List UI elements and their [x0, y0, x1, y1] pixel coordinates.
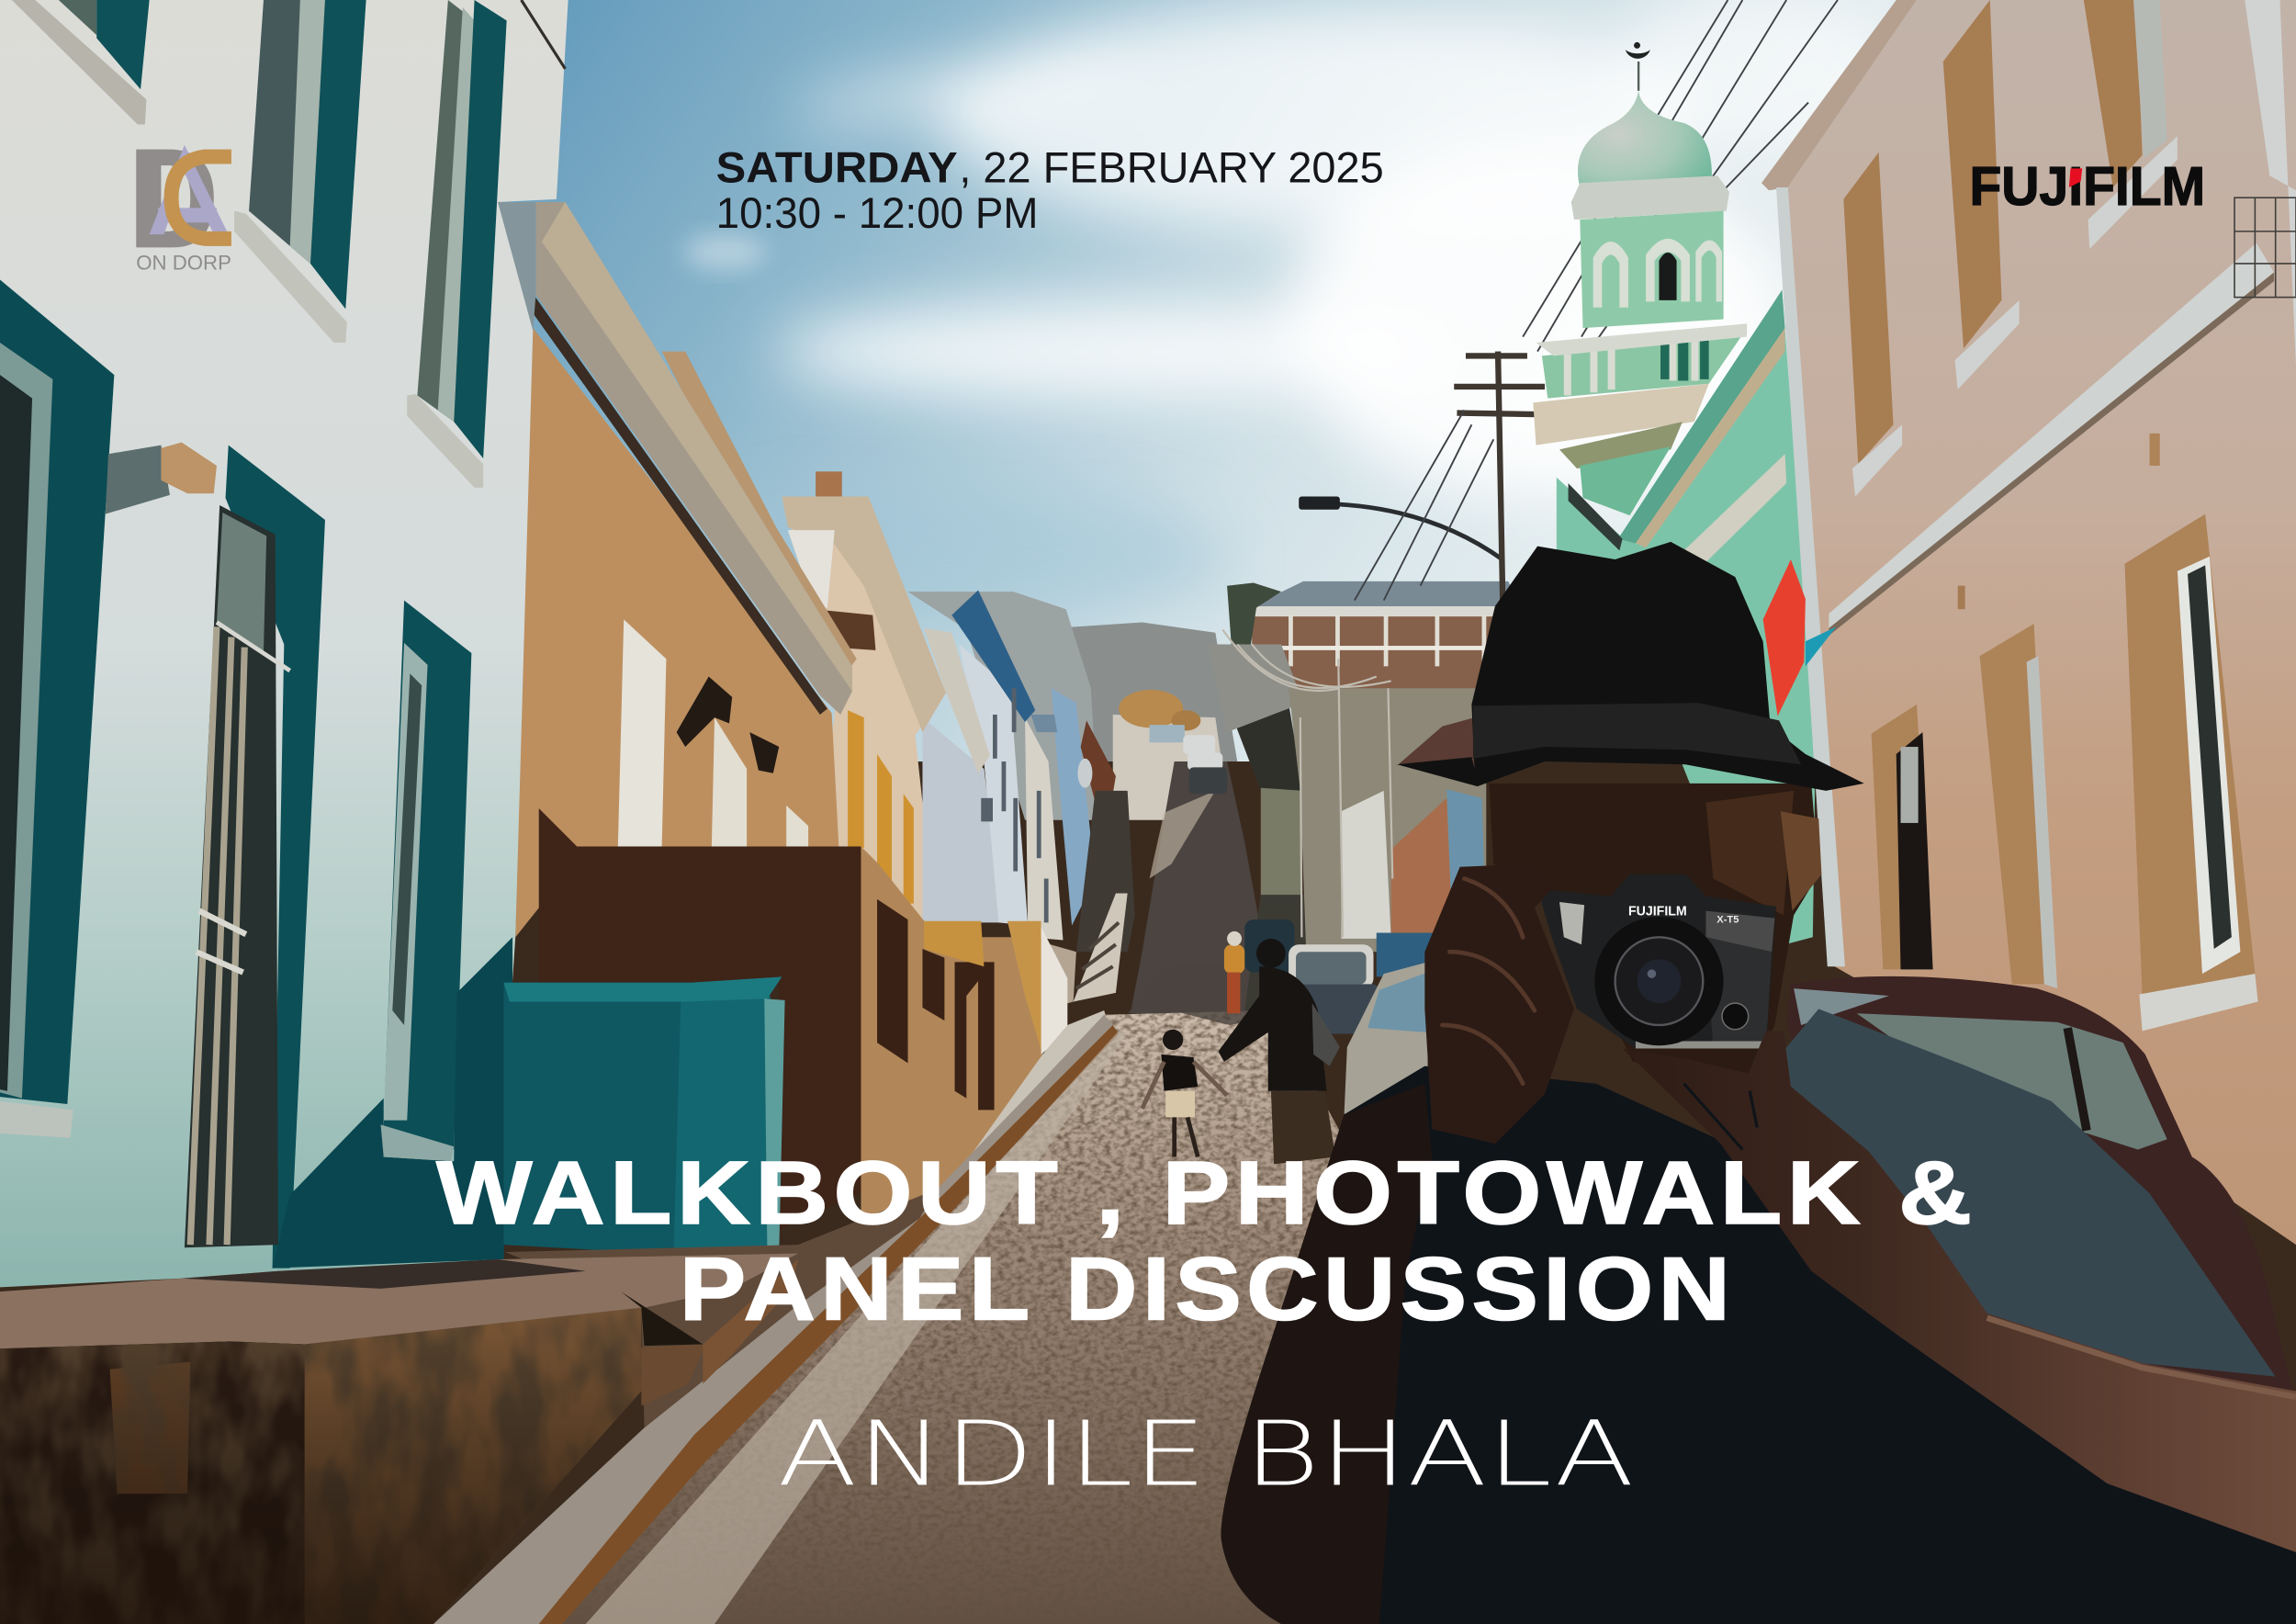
cobbled road — [527, 761, 1421, 1624]
orange building with cornice — [501, 202, 857, 937]
window: recess three — [2084, 0, 2178, 249]
hand on camera grip — [1424, 864, 1574, 1144]
speaker name: ANDILE BHALA — [778, 1403, 1634, 1506]
door: dark recess — [1872, 705, 1933, 969]
child — [1142, 1030, 1227, 1156]
logo: DAC on Dorp — [136, 145, 231, 274]
woman silhouette — [1219, 939, 1340, 1164]
event date and time: SATURDAY — [716, 142, 958, 191]
event title — [436, 1143, 1976, 1338]
people walking — [1142, 931, 1340, 1164]
door with bars — [185, 445, 325, 1269]
event date and time: , 22 FEBRUARY 2025 — [959, 142, 1384, 191]
car: dark teal — [1244, 919, 1294, 973]
wall bracket — [106, 442, 217, 514]
hand and forearm — [1623, 1031, 2296, 1552]
window: lower narrow — [1980, 624, 2057, 988]
street cars — [1244, 919, 1428, 1149]
window: upper second — [234, 0, 366, 343]
teal box — [503, 976, 785, 1255]
event title: PANEL DISCUSSION — [680, 1238, 1735, 1338]
far steps and shade beside the road — [1025, 791, 1135, 1010]
camera: X-T5 — [1716, 914, 1739, 925]
icon: crescent finial — [1626, 42, 1650, 91]
parked cars up the hill — [1183, 735, 1227, 794]
car: silver sedan — [1345, 962, 1428, 1149]
sky with clouds — [483, 0, 1948, 761]
camera — [1537, 874, 1776, 1048]
street lamp, pole and wires — [1299, 0, 1838, 659]
window: recess two — [1843, 152, 1902, 496]
event date and time — [716, 142, 1384, 237]
mosque minaret — [1533, 42, 1816, 952]
event title: WALKBOUT , PHOTOWALK & — [436, 1143, 1976, 1243]
window sill — [381, 1124, 454, 1161]
stone platform — [0, 1190, 937, 1624]
lens — [1594, 917, 1724, 1045]
neck and face — [1489, 784, 1821, 1077]
dark brown wall and low tan walls — [539, 808, 1107, 1230]
shirt sleeve — [1750, 1009, 2276, 1377]
window: lower middle — [384, 601, 471, 1149]
vintage car — [1786, 976, 2296, 1405]
photographer — [1221, 542, 2296, 1624]
window: recess one — [1943, 0, 2020, 389]
logo: DAC on Dorp: ON DORP — [136, 251, 231, 274]
icon: blue feather — [1806, 626, 1836, 666]
window: upper third — [407, 0, 507, 488]
person in orange at distance — [1224, 931, 1244, 1013]
road curb — [433, 1015, 1128, 1624]
icon: wall lamps — [677, 677, 779, 773]
left white and teal building — [0, 0, 568, 1287]
right beige building — [1761, 0, 2296, 1245]
right upper street houses — [1208, 581, 1523, 1010]
window: large left — [0, 279, 114, 1138]
building shadow — [273, 937, 512, 1269]
logo: Fujifilm: FUJIFILM — [1969, 157, 2205, 217]
event date and time: 10:30 - 12:00 PM — [716, 188, 1038, 237]
hat — [1397, 542, 1864, 791]
antenna — [2234, 197, 2296, 298]
icon: red flower — [1763, 559, 1806, 716]
window: lower sash — [2124, 514, 2258, 1031]
background buildings and hillside — [782, 471, 1237, 940]
car: grey hatchback — [1286, 944, 1379, 1034]
window: top left — [12, 0, 150, 125]
camera: FUJIFILM — [1628, 903, 1687, 919]
torso and left arm — [1221, 1066, 2296, 1624]
